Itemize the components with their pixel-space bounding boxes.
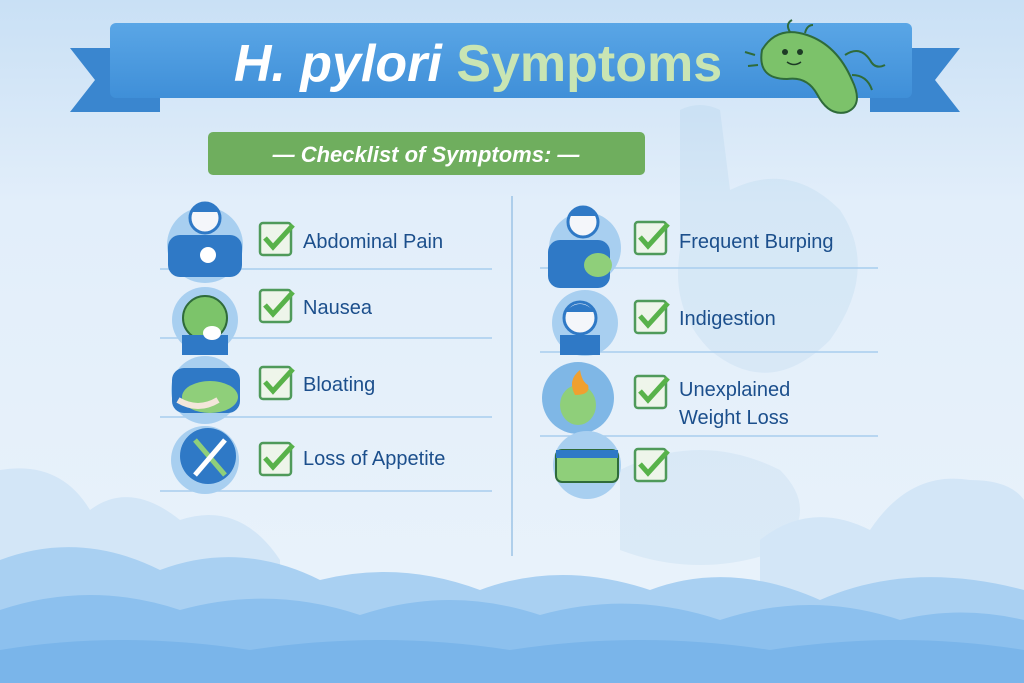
title text: H. pylori Symptoms (234, 35, 722, 93)
item: Bloating: Bloating (303, 374, 375, 396)
item: Unexplained Weight Loss (635, 376, 790, 429)
item: Indigestion (635, 301, 776, 333)
icon: measuring tape (553, 431, 621, 499)
icon: nausea (172, 287, 238, 355)
bottom clouds (0, 468, 1024, 683)
panel: right column symptoms (542, 207, 834, 499)
icon: bacterium (745, 20, 885, 113)
item: Loss of Appetite: Loss of Appetite (303, 448, 445, 470)
icon: weight loss stomach (542, 362, 614, 434)
icon: indigestion (552, 290, 618, 356)
icon: burping (548, 207, 621, 288)
item: Unexplained Weight Loss: Unexplained (679, 379, 790, 401)
background stomach silhouette (620, 105, 858, 565)
item: Abdominal Pain: Abdominal Pain (303, 231, 443, 253)
item: Abdominal Pain (260, 223, 443, 255)
item: empty checkbox (635, 449, 668, 481)
item: Frequent Burping (635, 222, 834, 254)
icon: loss of appetite (171, 426, 239, 494)
icon: abdominal pain (167, 203, 243, 283)
item: Bloating (260, 367, 375, 399)
panel: left column symptoms (167, 203, 445, 494)
title banner (70, 20, 960, 113)
checklist heading: — Checklist of Symptoms: — (272, 142, 580, 167)
item: Nausea (260, 290, 373, 322)
checklist heading (208, 132, 645, 175)
item: Indigestion: Indigestion (679, 308, 776, 330)
icon: bloating (171, 356, 240, 424)
item: Frequent Burping: Frequent Burping (679, 231, 834, 253)
column divider (511, 196, 513, 556)
item: Loss of Appetite (260, 443, 445, 475)
item: Nausea: Nausea (303, 297, 373, 319)
item: Unexplained Weight Loss: Weight Loss (679, 407, 789, 429)
